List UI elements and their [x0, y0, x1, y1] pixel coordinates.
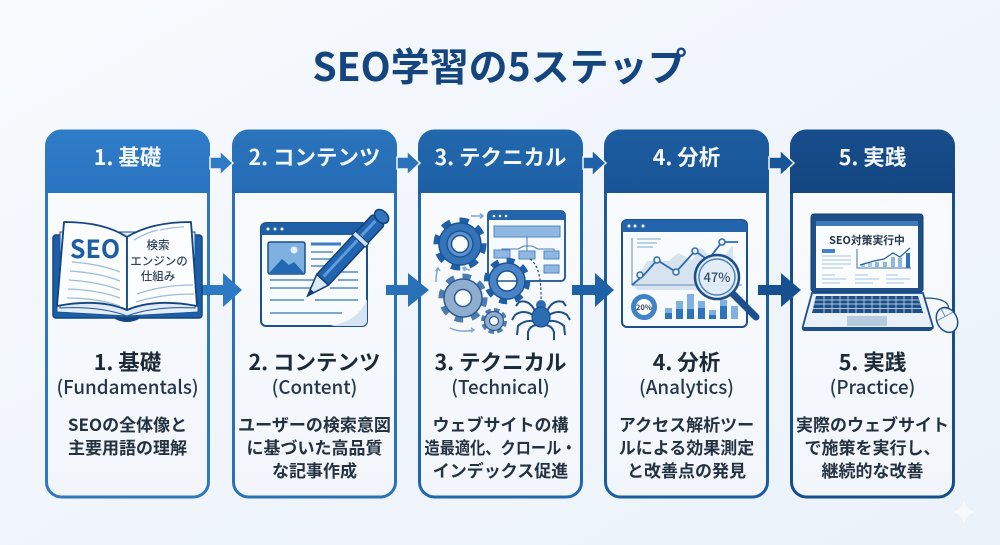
step 2 subtitle: (Content) [272, 373, 357, 400]
mouse cable [925, 298, 949, 312]
arrow: body 4 to 5 [758, 273, 801, 307]
book text: search engine mechanics: 仕組み [141, 268, 175, 284]
panel: step 1 fundamentals [45, 130, 210, 497]
header label: step 3: 3. テクニカル [434, 141, 567, 172]
step 5 description: 継続的な改善 [822, 457, 924, 482]
screen chart [857, 248, 911, 268]
header: step 3 [418, 130, 583, 193]
gear 1 [437, 221, 483, 267]
step 4 description: ルによる効果測定 [619, 434, 754, 459]
gear 3 [487, 261, 527, 301]
icon: laptop and mouse [802, 214, 962, 336]
step 2 description: に基づいた高品質 [246, 434, 382, 459]
arrow: body 3 to 4 [572, 273, 614, 307]
decorative sparkle [952, 500, 976, 524]
step 4 description: アクセス解析ツー [619, 411, 754, 436]
step 5 description: 実際のウェブサイト [796, 411, 949, 436]
step 3 description line 2: 造最適化、クロール・ [424, 434, 576, 459]
header label: step 4: 4. 分析 [653, 141, 720, 172]
header label: step 5: 5. 実践 [839, 141, 907, 172]
step 5 subtitle: (Practice) [830, 373, 915, 400]
arrow: body 2 to 3 [386, 273, 429, 307]
icon: gears, site structure and spider [436, 211, 570, 340]
pen [301, 206, 392, 302]
header label: step 1: 1. 基礎 [94, 141, 162, 172]
arrow: header 2 to 3 [397, 151, 420, 175]
step 4 heading: 4. 分析 [653, 346, 720, 377]
header label: step 2: 2. コンテンツ [248, 141, 381, 172]
book text: search engine mechanics: エンジンの [130, 253, 188, 269]
keyboard [812, 296, 923, 313]
step 3 heading: 3. テクニカル [434, 346, 567, 377]
donut value: 20% [636, 302, 652, 313]
arrow: header 3 to 4 [583, 150, 606, 176]
trackpad [847, 316, 887, 326]
gear 2 [442, 277, 484, 319]
laptop base [803, 293, 933, 329]
arrow: body 1 to 2 [202, 273, 242, 307]
step 1 description: SEOの全体像と [68, 411, 187, 436]
step 2 description: ユーザーの検索意図 [238, 411, 391, 436]
panel: step 4 analytics [604, 130, 769, 497]
step 1 heading: 1. 基礎 [94, 346, 162, 377]
step 3 subtitle: (Technical) [451, 373, 550, 400]
site structure window [488, 211, 565, 281]
step 2 heading: 2. コンテンツ [248, 346, 381, 377]
header: step 2 [232, 130, 397, 193]
title: SEO学習の5ステップ [312, 37, 687, 93]
header: step 4 [604, 130, 769, 193]
step 4 subtitle: (Analytics) [639, 373, 734, 400]
bar chart [665, 294, 738, 319]
step 1 description: 主要用語の理解 [68, 434, 187, 459]
icon: analytics dashboard and magnifier [622, 220, 756, 327]
step 5 heading: 5. 実践 [839, 346, 907, 377]
step 3 description: ウェブサイトの構 [432, 411, 568, 436]
icon: open book [53, 222, 202, 322]
line chart [632, 238, 742, 290]
mouse [932, 304, 962, 336]
header: step 5 [790, 130, 955, 193]
panel: step 3 technical [418, 130, 583, 497]
header: step 1 [45, 130, 210, 193]
magnifier value: 47% [703, 267, 731, 286]
panel: step 2 content [232, 130, 397, 497]
arrow: header 4 to 5 [769, 150, 794, 176]
step 5 description: で施策を実行し、 [804, 434, 940, 459]
icon: web article and pen [261, 206, 392, 326]
book text: SEO: SEO [70, 230, 120, 266]
step 4 description: と改善点の発見 [627, 457, 746, 482]
panel: step 5 practice [790, 130, 955, 497]
step 2 description: な記事作成 [272, 457, 357, 482]
screen text: SEO対策実行中 [829, 232, 905, 248]
step 3 description line 3: インデックス促進 [433, 457, 568, 482]
laptop screen [811, 214, 923, 292]
arrow: header 1 to 2 [210, 151, 233, 175]
spider [512, 300, 570, 340]
gear 4 [484, 310, 504, 332]
book text: search engine mechanics: 検索 [146, 237, 170, 253]
step 1 subtitle: (Fundamentals) [56, 373, 199, 400]
